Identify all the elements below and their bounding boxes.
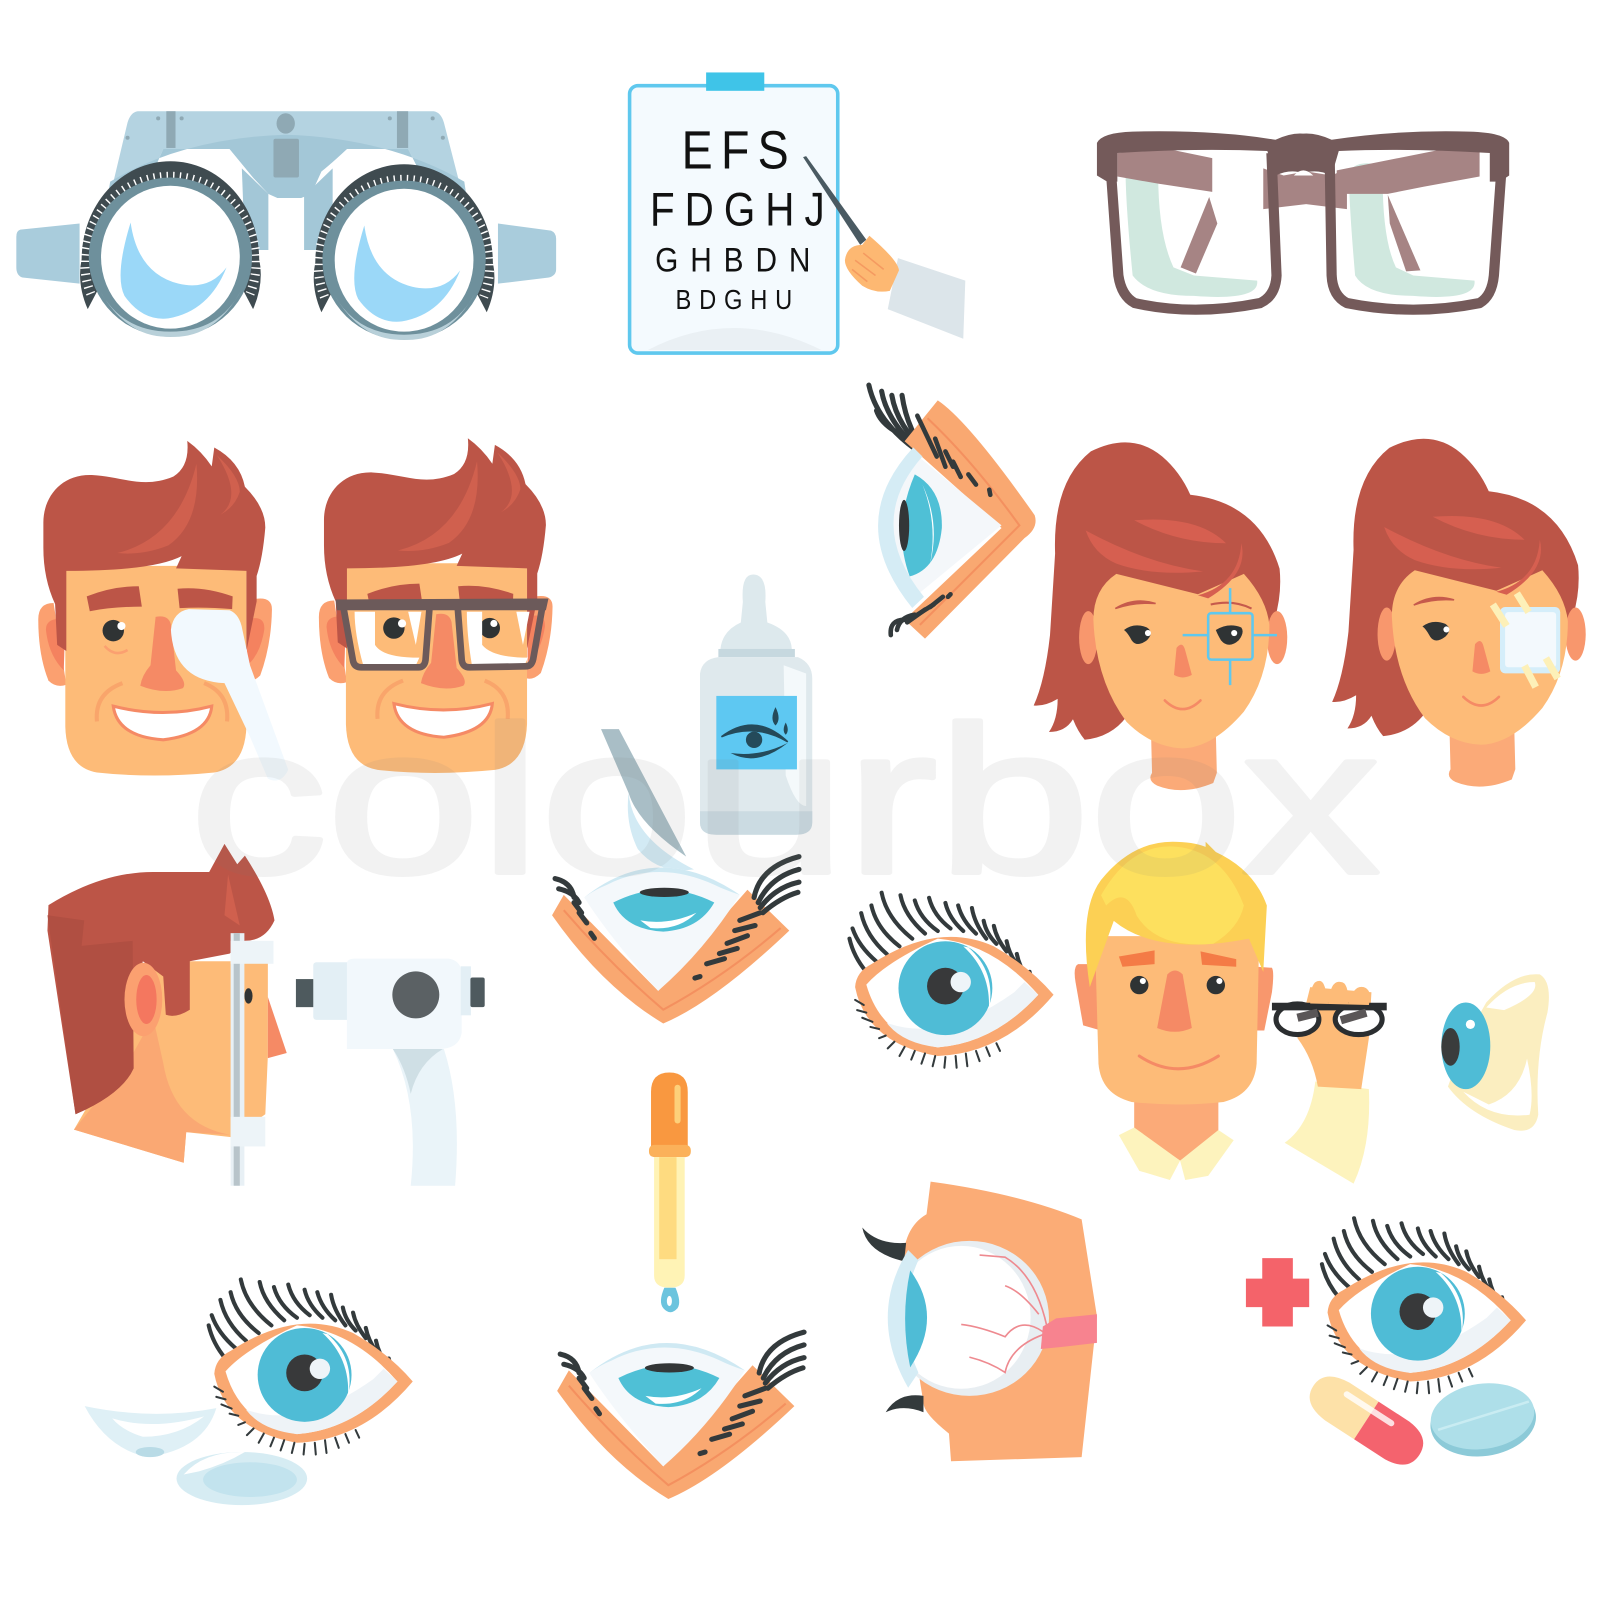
bottle label (716, 696, 797, 769)
ear (124, 963, 162, 1036)
hand (1297, 987, 1371, 1089)
chart clip (706, 72, 764, 91)
man in profile at slit lamp (47, 844, 485, 1186)
woman with target crosshair (1034, 442, 1287, 790)
brows (1119, 950, 1155, 967)
eye patch (1493, 593, 1560, 687)
man's open eye (103, 620, 128, 653)
large front eye (849, 893, 1054, 1068)
chart letters (650, 119, 825, 316)
lens reflections (355, 612, 530, 665)
brown glasses (1097, 131, 1509, 310)
eye chart with pointer (630, 72, 965, 353)
face (1095, 936, 1259, 1104)
nose (1157, 971, 1192, 1032)
sleeve (1285, 1082, 1369, 1184)
woman with eye patch (1332, 439, 1586, 787)
side eye upper lashes (869, 385, 930, 459)
slit lamp head (296, 959, 485, 1186)
contact lens two (177, 1452, 307, 1505)
contact lens one (85, 1406, 216, 1457)
eye receiving drop (557, 1332, 804, 1499)
man's eyes (383, 617, 500, 639)
chart letters: FDGHJ (650, 184, 825, 236)
slit lamp chin rest (231, 933, 273, 1186)
top plate (102, 111, 471, 230)
eyes (1130, 976, 1225, 994)
ears (1075, 964, 1101, 1031)
eye with yellow contact shell (1441, 974, 1549, 1131)
left lens ring (80, 161, 261, 337)
eye under surgical lens (552, 857, 799, 1023)
chart letters: EFS (682, 119, 789, 180)
tablet (1425, 1377, 1541, 1463)
pointer (803, 156, 866, 245)
occluder paddle (171, 609, 288, 781)
trial frame (16, 111, 556, 340)
target crosshair (1183, 588, 1277, 685)
sleeve (888, 258, 965, 339)
neck and collar (1119, 1099, 1234, 1180)
held glasses (1272, 1004, 1387, 1035)
man wearing glasses (319, 438, 553, 773)
hair (1086, 842, 1267, 987)
side eye lid lashes (891, 416, 990, 635)
eye with pills (1301, 1218, 1541, 1474)
chart letters: BDGHU (676, 286, 792, 316)
scalpel and lifted contact lens (601, 729, 694, 870)
eye with contact lenses (85, 1279, 413, 1505)
smile (1139, 1056, 1218, 1069)
optic nerve (1041, 1314, 1097, 1349)
eye drops bottle (700, 574, 812, 835)
profile hair (47, 844, 274, 1114)
side view eye (869, 385, 1036, 639)
lens reflections (1117, 148, 1480, 297)
lashes (862, 1228, 906, 1261)
dropper (649, 1072, 691, 1312)
right lens ring (314, 164, 494, 340)
medical cross (1246, 1258, 1309, 1327)
watermark: colourbox (190, 684, 1380, 917)
woman's right eye (1216, 625, 1243, 645)
profile skin (74, 961, 268, 1163)
eyeball (890, 1241, 1049, 1396)
frame (1111, 153, 1501, 310)
chart letters: GHBDN (655, 240, 810, 279)
skin block (903, 1182, 1097, 1461)
man with eye occluder (38, 441, 288, 781)
drop (661, 1288, 679, 1312)
side arms (16, 223, 556, 284)
plate fittings (126, 111, 445, 178)
blond man holding glasses (1075, 842, 1387, 1184)
chart board (630, 86, 838, 353)
veins (961, 1255, 1047, 1372)
glasses frame (343, 604, 543, 667)
hand (845, 236, 899, 292)
capsule (1301, 1367, 1432, 1474)
eyeball cross-section (862, 1182, 1097, 1461)
